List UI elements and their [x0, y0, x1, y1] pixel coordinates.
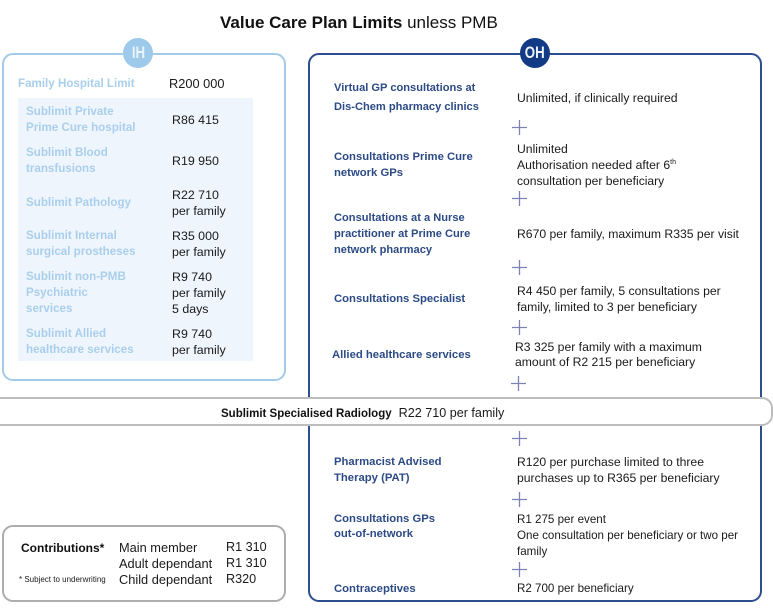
sublimit psychiatric label: Psychiatric [26, 286, 88, 299]
icon: plus [512, 260, 527, 275]
icon: plus [512, 120, 527, 135]
sublimit allied label: Sublimit Allied [26, 327, 106, 340]
sublimit pathology value [172, 188, 226, 218]
sublimit prostheses value: R35 000 [172, 229, 219, 243]
out-of-network GPs value: R1 275 per event [517, 513, 606, 526]
sublimit private hospital label: Sublimit Private [26, 105, 114, 118]
banner: specialised radiology [0, 397, 773, 426]
sublimit allied label: healthcare services [26, 343, 134, 356]
allied healthcare value [515, 340, 702, 369]
contribution amounts: R320 [226, 572, 256, 586]
PAT value: purchases up to R365 per beneficiary [517, 471, 720, 485]
sublimit prostheses value [172, 229, 226, 259]
nurse practitioner value: R670 per family, maximum R335 per visit [517, 227, 739, 241]
out-of-network GPs label: Consultations GPs [334, 513, 435, 525]
sublimit prostheses label: Sublimit Internal [26, 229, 117, 242]
panel: contributions [2, 525, 286, 602]
specialist value: family, limited to 3 per beneficiary [517, 300, 697, 314]
contribution amounts: R1 310 [226, 556, 267, 570]
sublimit psychiatric value: per family [172, 286, 226, 300]
PAT label: Therapy (PAT) [334, 472, 410, 484]
icon: OH badge: OH [525, 43, 545, 62]
sublimit private hospital label: Prime Cure hospital [26, 121, 136, 134]
contribution member names: Child dependant [119, 572, 212, 587]
sublimit allied value: per family [172, 343, 226, 357]
prime cure GPs value: consultation per beneficiary [517, 174, 664, 188]
sublimit pathology value: per family [172, 204, 226, 218]
specialist label: Consultations Specialist [334, 293, 465, 305]
family hospital limit label: Family Hospital Limit [18, 77, 135, 90]
specialist value [517, 284, 721, 314]
panel: sublimits background [18, 98, 253, 361]
icon: plus [511, 376, 526, 391]
sublimit private hospital label [26, 105, 136, 134]
sublimit pathology value: R22 710 [172, 188, 219, 202]
PAT value: R120 per purchase limited to three [517, 455, 704, 469]
out-of-network GPs label: out-of-network [334, 528, 413, 540]
underwriting note: * Subject to underwriting [19, 575, 106, 584]
panel: out-of-hospital limits [308, 53, 762, 602]
sublimit psychiatric label: Sublimit non-PMB [26, 270, 126, 283]
contributions heading: Contributions* [21, 541, 104, 555]
icon: IH badge [123, 38, 153, 68]
sublimit blood value: R19 950 [172, 154, 219, 168]
sublimit pathology label: Sublimit Pathology [26, 196, 131, 209]
sublimit psychiatric value: 5 days [172, 302, 209, 316]
virtual GP label: Dis-Chem pharmacy clinics [334, 101, 479, 113]
nurse practitioner label: practitioner at Prime Cure [334, 228, 470, 240]
sublimit blood label [26, 146, 108, 175]
PAT value [517, 455, 720, 485]
prime cure GPs label [334, 151, 473, 179]
sublimit blood label: Sublimit Blood [26, 146, 108, 159]
sublimit allied value: R9 740 [172, 327, 212, 341]
nurse practitioner label: Consultations at a Nurse [334, 212, 465, 224]
allied healthcare label: Allied healthcare services [332, 349, 471, 361]
sublimit prostheses label [26, 229, 136, 258]
sublimit psychiatric value [172, 270, 226, 316]
specialist value: R4 450 per family, 5 consultations per [517, 284, 721, 298]
contribution amounts: R1 310 [226, 540, 267, 554]
title: Value Care Plan Limits unless PMB [220, 13, 498, 32]
nurse practitioner label [334, 212, 470, 256]
sublimit private hospital value: R86 415 [172, 113, 219, 127]
PAT label [334, 456, 442, 484]
prime cure GPs value: Authorisation needed after 6th [517, 158, 676, 172]
sublimit psychiatric value: R9 740 [172, 270, 212, 284]
prime cure GPs label: network GPs [334, 167, 403, 179]
icon: plus [512, 191, 527, 206]
allied healthcare value: R3 325 per family with a maximum [515, 340, 702, 354]
contribution member names [119, 540, 212, 587]
out-of-network GPs value: family [517, 545, 547, 558]
contribution amounts [226, 540, 267, 586]
PAT label: Pharmacist Advised [334, 456, 442, 468]
virtual GP label [334, 82, 479, 113]
contribution member names: Main member [119, 540, 197, 555]
icon: IH badge: IH [131, 43, 145, 62]
contraceptives value: R2 700 per beneficiary [517, 582, 634, 595]
icon: plus [512, 562, 527, 577]
nurse practitioner label: network pharmacy [334, 244, 432, 256]
icon: plus [512, 320, 527, 335]
icon: plus [512, 492, 527, 507]
contribution member names: Adult dependant [119, 556, 212, 571]
contraceptives label: Contraceptives [334, 583, 416, 595]
sublimit prostheses label: surgical prostheses [26, 245, 136, 258]
prime cure GPs value: Unlimited [517, 142, 568, 156]
out-of-network GPs label [334, 513, 435, 540]
sublimit prostheses value: per family [172, 245, 226, 259]
out-of-network GPs value [517, 513, 738, 558]
sublimit allied value [172, 327, 226, 357]
virtual GP label: Virtual GP consultations at [334, 82, 475, 94]
radiology text: Sublimit Specialised Radiology R22 710 per family [221, 406, 504, 420]
panel: in-hospital limits [2, 53, 286, 381]
icon: plus [512, 431, 527, 446]
allied healthcare value: amount of R2 215 per beneficiary [515, 355, 695, 369]
virtual GP value: Unlimited, if clinically required [517, 91, 678, 105]
family hospital limit value: R200 000 [169, 76, 224, 91]
sublimit allied label [26, 327, 134, 356]
sublimit blood label: transfusions [26, 162, 96, 175]
sublimit psychiatric label: services [26, 302, 72, 315]
prime cure GPs label: Consultations Prime Cure [334, 151, 473, 163]
prime cure GPs value [517, 142, 676, 188]
out-of-network GPs value: One consultation per beneficiary or two per [517, 529, 738, 542]
icon: OH badge [520, 38, 550, 68]
sublimit psychiatric label [26, 270, 126, 315]
